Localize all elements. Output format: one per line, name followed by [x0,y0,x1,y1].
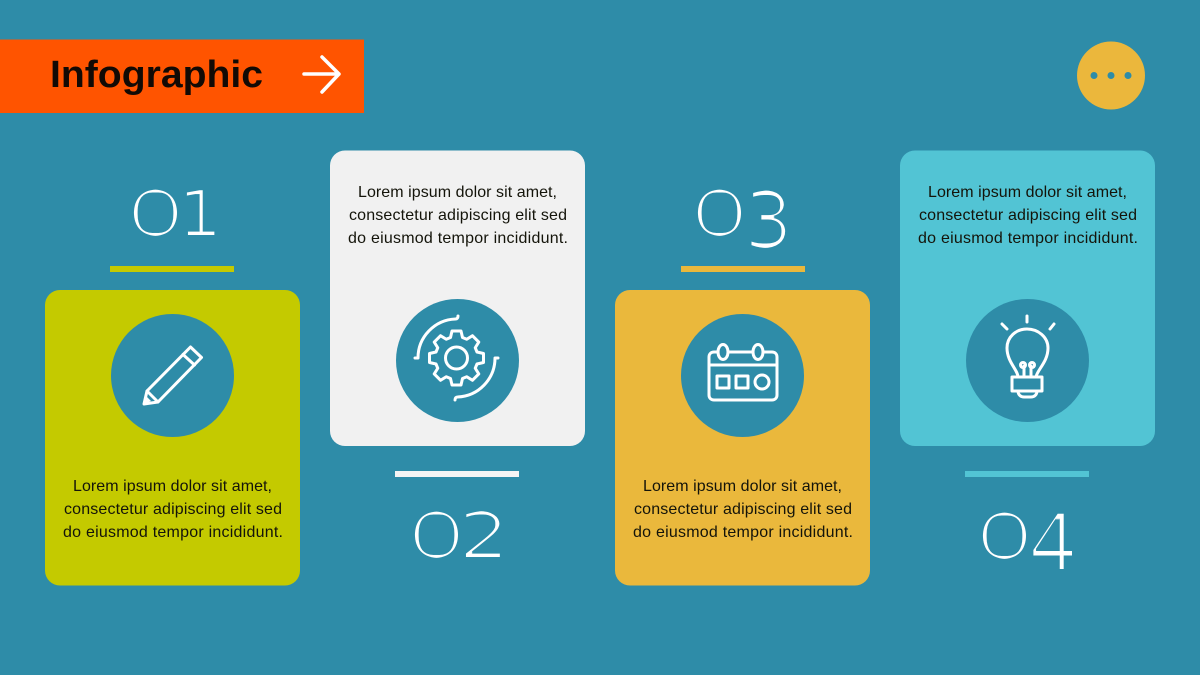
number 01: 0 [124,178,186,252]
text block 04: do eiusmod tempor incididunt. [918,230,1138,247]
text block 03: consectetur adipiscing elit sed [634,501,852,518]
accent bar 02 [395,471,519,477]
icon: arrow [304,57,339,92]
text block 02: consectetur adipiscing elit sed [349,207,567,224]
panel: step 03 [615,177,870,586]
number 04: 0 [974,501,1036,575]
card 04 [900,150,1155,446]
panel: step 01 [45,178,300,586]
card 02 [330,150,585,446]
number 02: 2 [458,500,510,574]
number 03 [688,177,794,267]
text block 02: Lorem ipsum dolor sit amet, [358,184,557,201]
panel: step 02 [330,150,585,574]
number 03: 3 [744,177,794,267]
menu button [1077,42,1145,110]
number 02: 0 [406,500,468,574]
accent bar 01 [110,266,234,272]
text block 04: consectetur adipiscing elit sed [919,207,1137,224]
icon: light bulb [966,299,1089,422]
text block 01: do eiusmod tempor incididunt. [63,524,283,541]
number 02 [406,500,510,574]
icon: calendar [681,314,804,437]
number 03: 0 [688,178,750,252]
text block 04: Lorem ipsum dolor sit amet, [928,184,1127,201]
text block 01: consectetur adipiscing elit sed [64,501,282,518]
text block 01: Lorem ipsum dolor sit amet, [73,478,272,495]
accent bar 03 [681,266,805,272]
text block 03: do eiusmod tempor incididunt. [633,524,853,541]
header banner [0,40,364,113]
icon: gear [396,299,519,422]
card 03 [615,290,870,586]
number 04 [974,499,1078,589]
number 01: 1 [177,178,223,252]
icon: pencil [111,314,234,437]
number 01 [124,178,223,252]
title: Infographic [50,54,263,96]
number 04: 4 [1028,499,1078,589]
text block 01 [63,478,283,541]
text block 03: Lorem ipsum dolor sit amet, [643,478,842,495]
text block 03 [633,478,853,541]
card 01 [45,290,300,586]
text block 02: do eiusmod tempor incididunt. [348,230,568,247]
text block 04 [918,184,1138,247]
panel: step 04 [900,150,1155,589]
accent bar 04 [965,471,1089,477]
text block 02 [348,184,568,247]
